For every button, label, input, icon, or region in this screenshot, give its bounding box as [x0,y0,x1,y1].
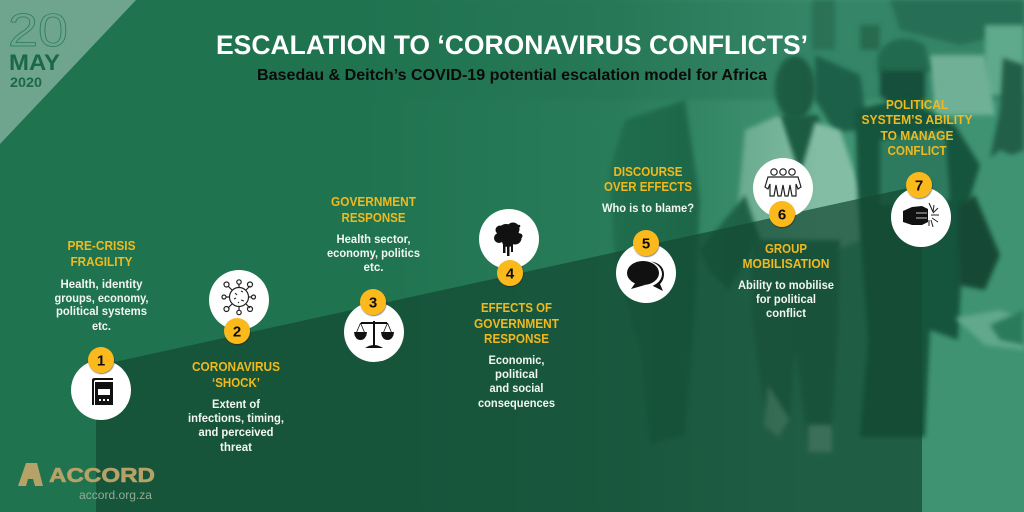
step 3 number badge [360,289,386,315]
step 4 description: Economic, [488,355,544,367]
step 4 number badge [497,260,523,286]
step 2 number badge: 2 [233,324,241,340]
step 2 description [188,399,284,454]
date badge: 2020 [10,75,42,90]
step 6 number badge [769,201,795,227]
date badge [8,4,68,90]
step 4 number badge: 4 [506,266,515,282]
step 1 icon: book [71,360,131,420]
step 6 icon: three people [753,158,813,218]
step 7 icon: fist impact [891,187,951,247]
step 3 description: etc. [364,262,384,274]
step 4 description: political [495,369,538,381]
step 6 heading: GROUP [765,242,807,256]
step 6 heading [742,242,830,271]
step 3: government response [327,195,420,362]
step 1 heading [68,239,136,269]
step 3 description: Health sector, [336,234,410,246]
rising dark green panel [96,185,922,512]
step 4 heading [474,301,559,346]
step 7 heading: POLITICAL [886,98,948,112]
step 6 number badge: 6 [778,206,786,224]
step 2 description: infections, timing, [188,413,284,425]
step 4 description: and social [490,383,544,395]
step 1 description: etc. [92,321,111,333]
step 2 number badge [224,318,250,344]
step 4 description [478,355,555,410]
step 6: group mobilisation [738,158,834,320]
step 5 number badge: 5 [642,236,650,252]
step 4: effects of government response [474,209,559,410]
step 6 description: Ability to mobilise [738,280,834,292]
subtitle: Basedau & Deitch’s COVID-19 potential escalation model for Africa [257,67,767,84]
step 2 heading [192,360,280,390]
step 7 number badge [906,172,932,198]
step 1 number badge [88,347,114,373]
step 6 description: for political [756,294,816,306]
step 2: coronavirus shock [188,270,284,454]
step 1 heading: PRE-CRISIS [68,239,136,253]
step 2 description: threat [220,442,252,454]
step 3 heading: GOVERNMENT [331,195,416,209]
step 4 description: consequences [478,398,555,410]
step 3 description: economy, politics [327,248,420,260]
step 1 description: political systems [56,306,147,318]
step 3 description [327,234,420,274]
step 5 heading: OVER EFFECTS [604,180,692,194]
step 5 icon: speech bubbles [616,243,676,303]
step 3 heading: RESPONSE [342,211,406,225]
step 4 heading: GOVERNMENT [474,317,559,331]
date badge: MAY [9,50,60,75]
step 4 icon: splatter tree [479,209,539,269]
step 7 number badge: 7 [915,178,923,194]
step 2 heading: CORONAVIRUS [192,360,280,374]
date corner triangle [0,0,136,144]
step 1 description: Health, identity [60,279,143,291]
step 5 description: Who is to blame? [602,203,694,215]
step 7 heading: TO MANAGE [880,129,954,143]
step 1 heading: FRAGILITY [70,255,133,269]
step 6 description: conflict [766,308,806,320]
step 2 description: and perceived [198,427,274,439]
step 2 icon: virus [209,270,269,330]
logo mark [18,463,43,486]
step 1 description: groups, economy, [54,293,148,305]
police officer [877,39,930,72]
step 1 number badge: 1 [97,352,105,370]
step 5 heading [604,165,692,194]
step 4 heading: RESPONSE [484,332,549,346]
step 2 heading: ‘SHOCK’ [212,376,260,390]
title: ESCALATION TO ‘CORONAVIRUS CONFLICTS’ [216,30,808,60]
step 7 heading [862,98,973,158]
step 1: pre-crisis fragility [54,239,148,420]
step 7 heading: CONFLICT [888,144,947,158]
step 7 heading: SYSTEM’S ABILITY [862,113,973,127]
step 6 description [738,280,834,320]
step 3 icon: scales [344,302,404,362]
date badge: 20 [8,4,68,56]
protester [775,56,815,120]
step 4 heading: EFFECTS OF [481,301,552,315]
step 3 heading [331,195,416,225]
rocks [955,310,1024,350]
step 1 description [54,279,148,333]
step 3 number badge: 3 [369,294,377,312]
logo url: accord.org.za [79,488,152,502]
left figure [610,100,700,445]
step 5: discourse over effects [602,165,694,303]
ACCORD logo [18,463,155,502]
step 7: political system's ability [862,98,973,247]
step 6 heading: MOBILISATION [742,257,830,271]
step 5 heading: DISCOURSE [614,165,682,179]
logo wordmark: ACCORD [49,465,155,487]
step 2 description: Extent of [212,399,260,411]
